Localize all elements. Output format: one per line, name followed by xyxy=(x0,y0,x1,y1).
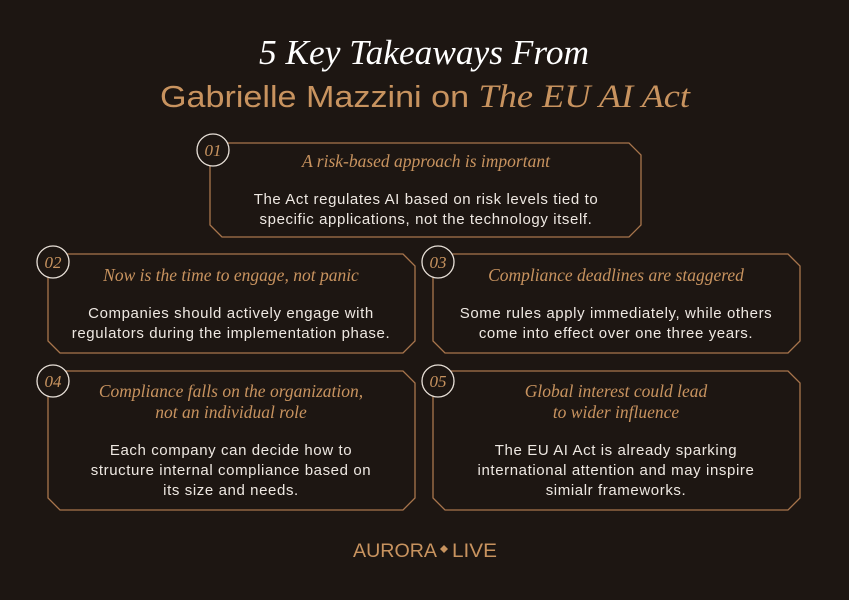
logo: Aurora Live: AURORA xyxy=(353,541,437,562)
icon: number 04 xyxy=(37,365,69,397)
icon: number 05: 05 xyxy=(430,372,446,391)
logo: Aurora Live xyxy=(353,541,497,562)
logo: Aurora Live: LIVE xyxy=(452,541,497,562)
panel: takeaway 05: simialr frameworks. xyxy=(546,482,686,499)
panel: takeaway 01: specific applications, not the technology itself. xyxy=(260,211,592,228)
title xyxy=(160,33,691,115)
panel: takeaway 01 xyxy=(197,134,641,237)
panel: takeaway 04: not an individual role xyxy=(155,402,307,422)
panel: takeaway 04: its size and needs. xyxy=(163,482,299,499)
panel: takeaway 04: Compliance falls on the organization, xyxy=(99,381,363,401)
title: Gabrielle Mazzini on The EU AI Act xyxy=(160,79,691,115)
panel: takeaway 03: Compliance deadlines are staggered xyxy=(488,265,744,285)
panel: takeaway 03 xyxy=(422,246,800,353)
panel: takeaway 05: to wider influence xyxy=(553,402,679,422)
icon: number 02 xyxy=(37,246,69,278)
icon: number 01: 01 xyxy=(204,141,222,160)
panel: takeaway 03: come into effect over one three years. xyxy=(479,325,753,342)
panel: takeaway 02: Now is the time to engage, not panic xyxy=(102,265,359,285)
panel: takeaway 02 xyxy=(37,246,415,353)
icon: number 03 xyxy=(422,246,454,278)
panel: takeaway 01: A risk-based approach is important xyxy=(301,151,551,171)
panel: takeaway 02: Companies should actively engage with xyxy=(88,305,374,322)
panel: takeaway 01: The Act regulates AI based on risk levels tied to xyxy=(254,191,598,208)
panel: takeaway 05 xyxy=(422,365,800,510)
panel: takeaway 04 xyxy=(37,365,415,510)
icon: number 02: 02 xyxy=(44,253,62,272)
panel: takeaway 05: international attention and may inspire xyxy=(478,462,754,479)
icon: number 05 xyxy=(422,365,454,397)
icon: number 04: 04 xyxy=(44,372,62,391)
title: 5 Key Takeaways From xyxy=(259,33,589,72)
panel: takeaway 05: Global interest could lead xyxy=(525,381,708,401)
panel: takeaway 02: regulators during the implementation phase. xyxy=(72,325,390,342)
icon: number 03: 03 xyxy=(430,253,446,272)
icon: number 01 xyxy=(197,134,229,166)
panel: takeaway 04: structure internal compliance based on xyxy=(91,462,371,479)
panel: takeaway 04: Each company can decide how to xyxy=(110,442,352,459)
panel: takeaway 03: Some rules apply immediately, while others xyxy=(460,305,772,322)
panel: takeaway 05: The EU AI Act is already sparking xyxy=(495,442,737,459)
